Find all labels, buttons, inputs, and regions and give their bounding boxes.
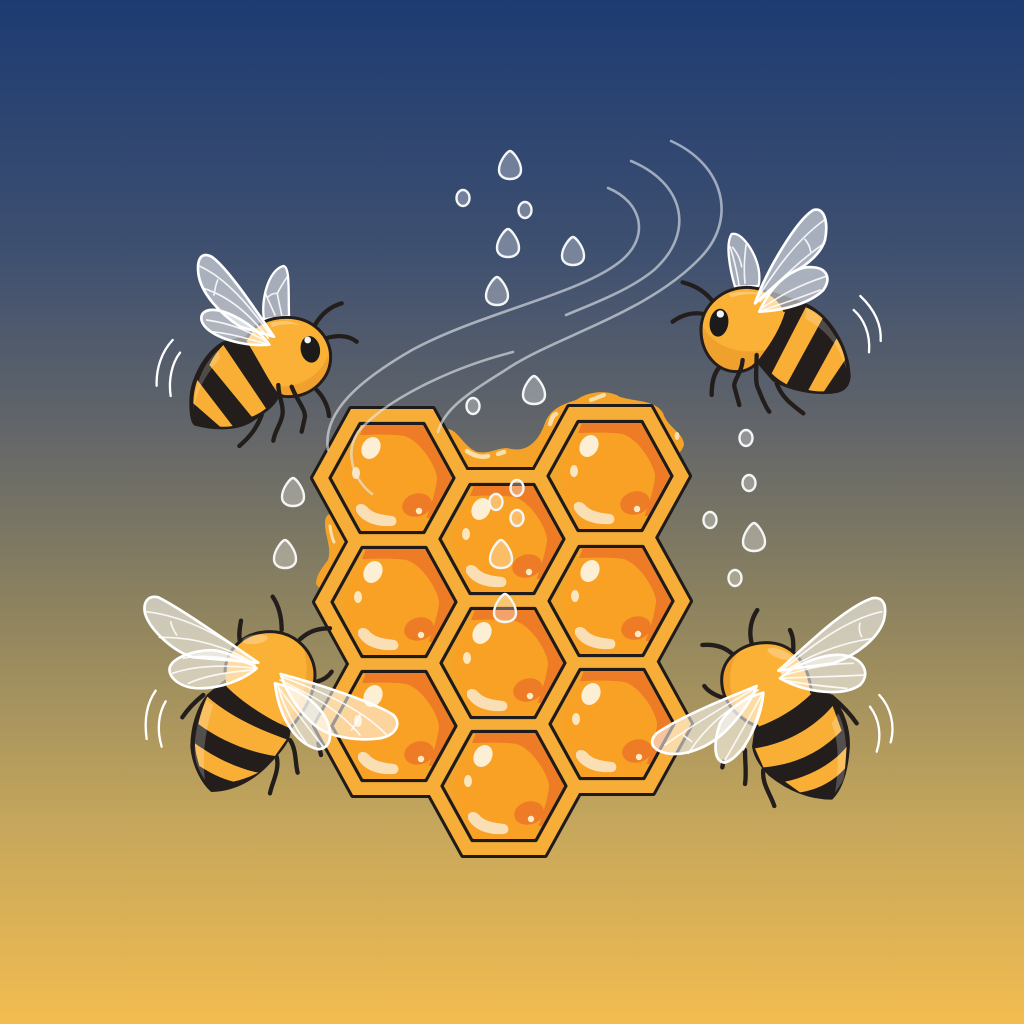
honey overflow behind comb	[316, 392, 684, 593]
wind swirl lines	[327, 141, 722, 494]
bee: bottom right	[652, 598, 892, 806]
bee: top right	[673, 210, 881, 413]
honey drops	[274, 151, 765, 622]
bee: bottom left	[144, 597, 397, 793]
honeycomb	[313, 407, 691, 855]
bee: top left	[157, 255, 357, 446]
